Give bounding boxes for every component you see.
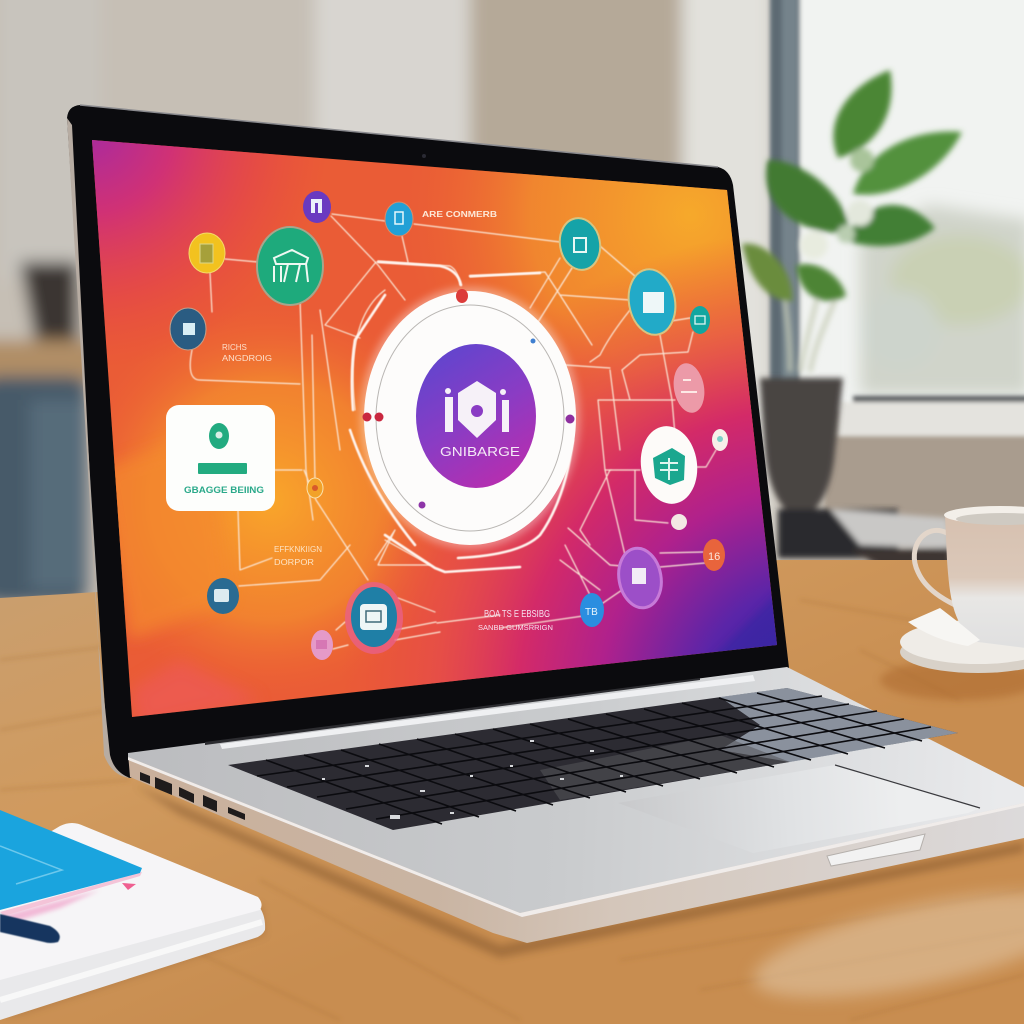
laptop lid: [67, 105, 789, 778]
node: pink small: [311, 630, 333, 660]
hub label: GNIBARGE: [440, 444, 520, 459]
node: navy: [170, 308, 206, 350]
screen: [80, 130, 800, 730]
node: green building: [257, 227, 323, 305]
label: bottom right: SANBD GUMSRRIGN: [478, 623, 553, 632]
connector lines: [190, 214, 716, 649]
node: orange small: [307, 478, 323, 498]
node: navy lower: [207, 578, 239, 614]
hub nodes: [362, 289, 574, 508]
node: blue: [385, 202, 413, 236]
node: blue lower: [580, 593, 604, 627]
label: lower left: DORPOR: [274, 558, 314, 567]
label: lower left: EFFKNKIIGN: [274, 545, 322, 554]
node: small white lower: [671, 514, 687, 530]
label: top: ARE CONMERB: [422, 210, 497, 219]
node: pink: [670, 361, 708, 415]
node: small teal: [690, 306, 710, 334]
node: orange lower: 16: [708, 551, 720, 563]
main hub circle: [360, 287, 580, 549]
icon: potted plant: [742, 70, 962, 578]
icon: pen: [0, 914, 60, 943]
label: left: ANGDROIG: [222, 354, 272, 363]
node: teal top right: [556, 215, 604, 273]
label: left: RICHS: [222, 343, 247, 352]
icon: side ports: [140, 772, 245, 820]
hinge strip: [205, 675, 755, 749]
white card: GBAGGE BEIING: [184, 485, 264, 495]
trackpad: [618, 765, 980, 853]
coffee cup and saucer: [900, 506, 1024, 673]
node: yellow: [189, 233, 225, 273]
node: white large: [636, 422, 702, 508]
keyboard: [228, 688, 958, 830]
node: blue lower: TB: [585, 607, 598, 618]
laptop base: [128, 667, 1024, 958]
notebook: [0, 810, 265, 1020]
node: orange lower: [703, 539, 725, 571]
label: bottom right: BOA TS E EBSIBG: [484, 609, 550, 620]
window and sill: [770, 0, 1024, 526]
lip notch: [827, 834, 925, 866]
node: teal camera: [345, 582, 403, 654]
background room: [0, 0, 777, 598]
white card: [166, 405, 275, 511]
blue card: [0, 810, 142, 916]
node: cyan folder: [624, 266, 680, 338]
node: purple: [303, 191, 331, 223]
node: small white right: [712, 429, 728, 451]
table: [0, 560, 1024, 1024]
hub shield logo: [445, 381, 509, 438]
node: purple lower: [614, 545, 666, 611]
